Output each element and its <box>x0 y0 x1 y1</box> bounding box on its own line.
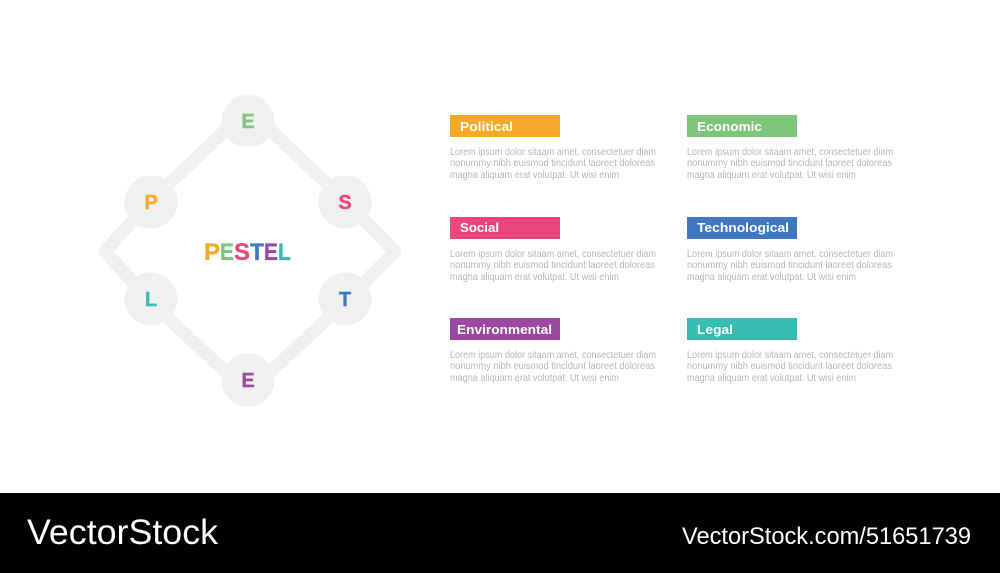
panel: Political <box>450 115 656 181</box>
label bar: Legal <box>687 318 797 340</box>
center title: PESTEL: T <box>250 239 264 266</box>
body text: Technological: Lorem ipsum dolor sitaam amet, consectetuer diam <box>687 248 893 260</box>
node: E bottom: E <box>241 370 255 392</box>
label bar: Technological: Technological <box>697 220 789 235</box>
label bar: Technological <box>687 217 797 239</box>
label bar: Economic <box>687 115 797 137</box>
label bar: Social: Social <box>460 220 499 235</box>
body text: Legal: Lorem ipsum dolor sitaam amet, consectetuer diam <box>687 349 893 361</box>
body text: Political: magna aliquam erat volutpat. Ut wisi enim <box>450 169 619 181</box>
label bar: Political: Political <box>460 119 513 134</box>
diamond outline <box>105 109 395 393</box>
footer logo text: VectorStock <box>27 513 219 552</box>
node: S <box>318 176 372 228</box>
body text: Economic: nonummy nibh euismod tincidunt laoreet doloreas <box>687 157 892 169</box>
footer url text: VectorStock.com/51651739 <box>682 523 971 550</box>
node: L: L <box>145 289 157 311</box>
node: S: S <box>338 192 352 214</box>
center title: PESTEL: E <box>264 239 278 266</box>
body text: Technological: magna aliquam erat volutpat. Ut wisi enim <box>687 271 856 283</box>
center title: PESTEL: S <box>234 239 250 266</box>
body text: Legal <box>687 349 893 384</box>
body text: Environmental: Lorem ipsum dolor sitaam amet, consectetuer diam <box>450 349 656 361</box>
body text: Legal: magna aliquam erat volutpat. Ut wisi enim <box>687 372 856 384</box>
node: T: T <box>339 289 351 311</box>
body text: Political: Lorem ipsum dolor sitaam amet, consectetuer diam <box>450 146 656 158</box>
center title: PESTEL: E <box>220 239 234 266</box>
center title: PESTEL: P <box>204 239 220 266</box>
body text: Environmental: magna aliquam erat volutpat. Ut wisi enim <box>450 372 619 384</box>
body text: Social: magna aliquam erat volutpat. Ut wisi enim <box>450 271 619 283</box>
node: L <box>124 272 178 326</box>
node: E top: E <box>241 111 255 133</box>
label bar: Economic: Economic <box>697 119 762 134</box>
body text: Environmental: nonummy nibh euismod tincidunt laoreet doloreas <box>450 360 655 372</box>
node: P: P <box>144 192 158 214</box>
body text: Social <box>450 248 656 283</box>
center title: PESTEL <box>204 239 291 266</box>
body text: Economic: Lorem ipsum dolor sitaam amet, consectetuer diam <box>687 146 893 158</box>
panel: Legal <box>687 318 893 384</box>
body text: Technological: nonummy nibh euismod tincidunt laoreet doloreas <box>687 259 892 271</box>
body text: Social: nonummy nibh euismod tincidunt laoreet doloreas <box>450 259 655 271</box>
body text: Political: nonummy nibh euismod tincidunt laoreet doloreas <box>450 157 655 169</box>
body text: Political <box>450 146 656 181</box>
label bar: Political <box>450 115 560 137</box>
panel: Economic <box>687 115 893 181</box>
node: E top <box>222 94 274 148</box>
panel: Environmental <box>450 318 656 384</box>
body text: Environmental <box>450 349 656 384</box>
node: T <box>318 272 372 326</box>
body text: Legal: nonummy nibh euismod tincidunt laoreet doloreas <box>687 360 892 372</box>
diagram: PESTEL ring <box>105 94 395 406</box>
label bar: Environmental: Environmental <box>457 322 552 337</box>
footer banner <box>0 493 1000 573</box>
label bar: Environmental <box>450 318 560 340</box>
body text: Economic <box>687 146 893 181</box>
body text: Social: Lorem ipsum dolor sitaam amet, consectetuer diam <box>450 248 656 260</box>
node: E bottom <box>222 354 274 406</box>
body text: Economic: magna aliquam erat volutpat. Ut wisi enim <box>687 169 856 181</box>
body text: Technological <box>687 248 893 283</box>
node: P <box>124 176 178 228</box>
panel: Social <box>450 217 656 283</box>
label bar: Legal: Legal <box>697 322 733 337</box>
label bar: Social <box>450 217 560 239</box>
center title: PESTEL: L <box>278 239 291 266</box>
panel: Technological <box>687 217 893 283</box>
